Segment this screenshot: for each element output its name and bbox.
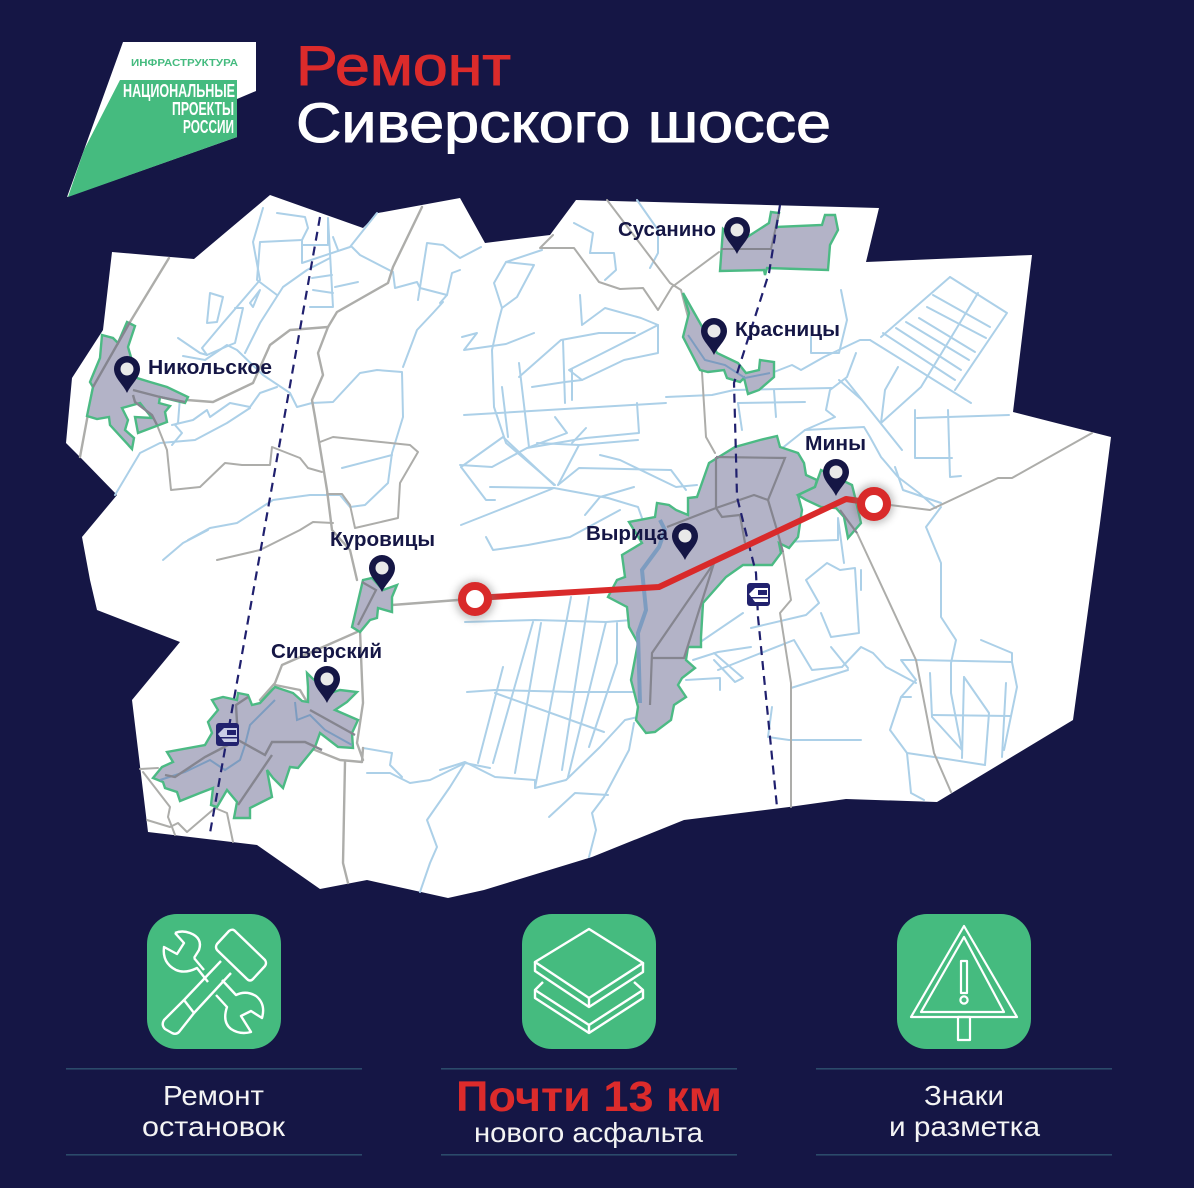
title [296,34,831,154]
icon: asphalt layers [522,914,656,1049]
route: repaired highway [475,499,873,598]
pin and label: Мины: Мины [805,433,866,455]
pin and label: Никольское: Никольское [148,357,272,379]
pin and label: Сусанино [618,217,750,254]
route start marker [455,580,495,620]
pin and label: Куровицы [330,529,435,592]
logo: national projects: ПРОЕКТЫ [172,99,234,119]
route end marker [854,484,894,524]
pin and label: Красницы: Красницы [735,319,840,341]
divider bottom [441,1154,737,1156]
label [142,1080,286,1142]
pin and label: Вырица: Вырица [586,523,669,545]
label: нового асфальта [474,1117,704,1148]
title: Сиверского шоссе [296,91,831,154]
roads [80,200,1092,883]
column: bus stop repair [66,914,362,1156]
town: Вырица [608,436,817,733]
map background [66,195,1111,898]
train icon: Сиверский [216,723,239,746]
column: new asphalt [441,914,737,1156]
pin and label: Вырица [586,523,698,560]
town: Куровицы [352,578,397,632]
town: Мины [798,470,861,538]
divider top [441,1068,737,1070]
pin and label: Куровицы: Куровицы [330,529,435,551]
icon: warning sign [897,914,1031,1049]
logo: national projects: НАЦИОНАЛЬНЫЕ [123,81,235,101]
stat: almost 13 km: Почти 13 км [456,1073,722,1121]
town: Сусанино [720,212,838,275]
town: Никольское [87,322,188,449]
divider bottom [66,1154,362,1156]
label [889,1080,1041,1142]
train icon: Вырица [747,583,770,606]
label: остановок [142,1111,286,1142]
pin and label: Сусанино: Сусанино [618,219,716,241]
town: Красницы [683,293,774,394]
icon: wrench and hammer [147,914,281,1049]
divider bottom [816,1154,1112,1156]
pin and label: Никольское [114,356,272,393]
pin and label: Сиверский: Сиверский [271,641,382,663]
logo: national projects: РОССИИ [183,117,234,137]
map panel [66,195,1111,898]
divider top [816,1068,1112,1070]
rivers [115,200,1017,892]
pin and label: Мины [805,433,866,496]
pin and label: Красницы [701,318,840,355]
divider top [66,1068,362,1070]
logo: national projects [67,42,256,197]
label: Ремонт [163,1080,264,1111]
logo: national projects: ИНФРАСТРУКТУРА [131,57,238,69]
label: Знаки [924,1080,1004,1111]
railway lines [210,205,780,833]
pin and label: Сиверский [271,641,382,703]
town: Сиверский [153,673,358,818]
title: Ремонт [296,34,511,97]
column: signs and markings [816,914,1112,1156]
label: и разметка [889,1111,1041,1142]
